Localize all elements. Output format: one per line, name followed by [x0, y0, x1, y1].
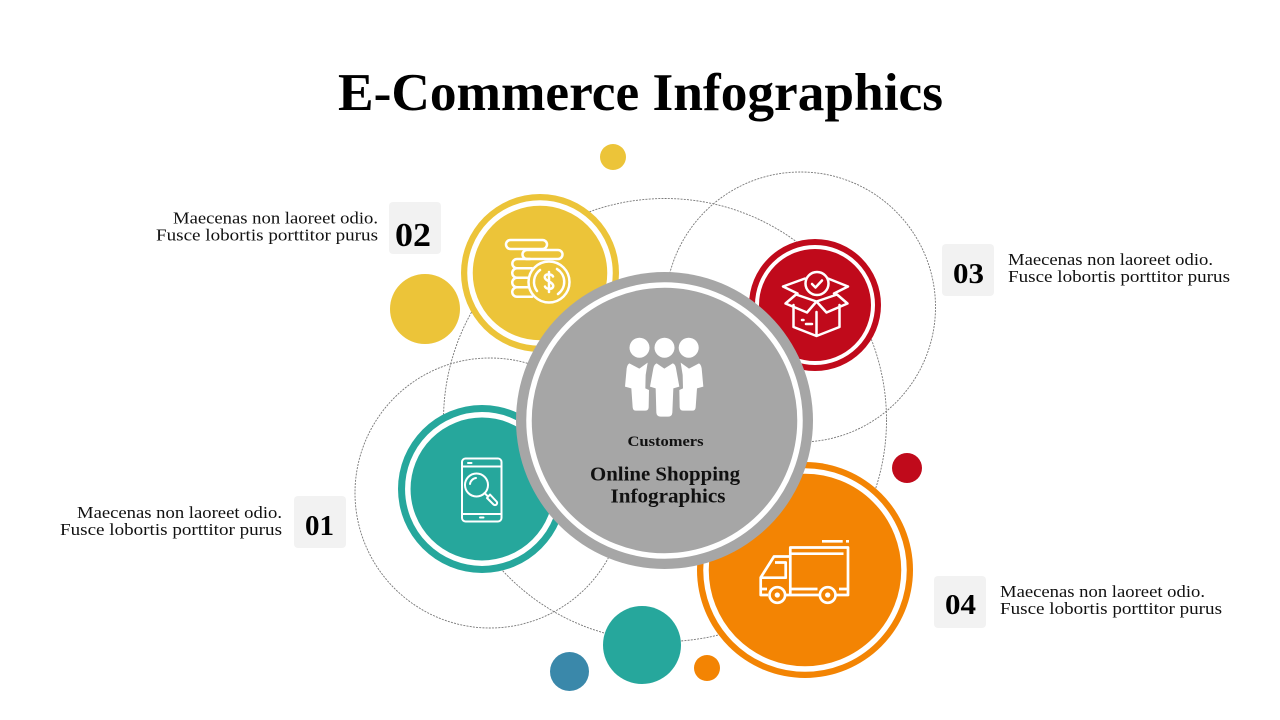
callout: 02: 02	[395, 217, 431, 254]
label: online shopping infographics	[590, 464, 740, 508]
icon: coins	[506, 240, 570, 302]
label: online shopping infographics: Infographics	[610, 486, 726, 508]
title: E-Commerce Infographics	[338, 64, 943, 122]
callout: 04	[934, 576, 1222, 628]
panel: center customers circle	[516, 272, 813, 569]
callout: 03: Maecenas non laoreet odio.	[1008, 250, 1213, 269]
icon: delivery truck	[761, 541, 849, 603]
icon: box with check	[783, 272, 848, 336]
callout: 04: Maecenas non laoreet odio.	[1000, 582, 1205, 601]
label: customers: Customers	[628, 434, 704, 450]
panel: 03 red circle	[749, 239, 881, 371]
callout: 03: 03	[953, 258, 984, 290]
callout: 03	[942, 244, 1230, 296]
callout: 04: 04	[945, 589, 976, 621]
callout: 02	[156, 202, 441, 254]
callout: 03: Fusce lobortis porttitor purus	[1008, 267, 1230, 286]
callout: 02: Maecenas non laoreet odio.	[173, 208, 378, 228]
panel: 04 orange circle	[697, 462, 913, 678]
panel: 01 teal circle	[398, 405, 566, 573]
callout: 04: Fusce lobortis porttitor purus	[1000, 599, 1222, 618]
callout: 02: Fusce lobortis porttitor purus	[156, 226, 378, 244]
decorative dots	[390, 144, 922, 691]
dashed orbit circles	[355, 172, 936, 642]
panel: 02 yellow circle	[461, 194, 619, 352]
icon: phone with magnifier	[462, 458, 502, 522]
callout: 01: 01	[305, 510, 334, 542]
callout: 01: Maecenas non laoreet odio.	[77, 503, 282, 522]
callout: 01	[60, 496, 346, 548]
callout: 01: Fusce lobortis porttitor purus	[60, 520, 282, 539]
icon: three people	[625, 338, 703, 417]
label: online shopping infographics: Online Shopping	[590, 464, 740, 486]
